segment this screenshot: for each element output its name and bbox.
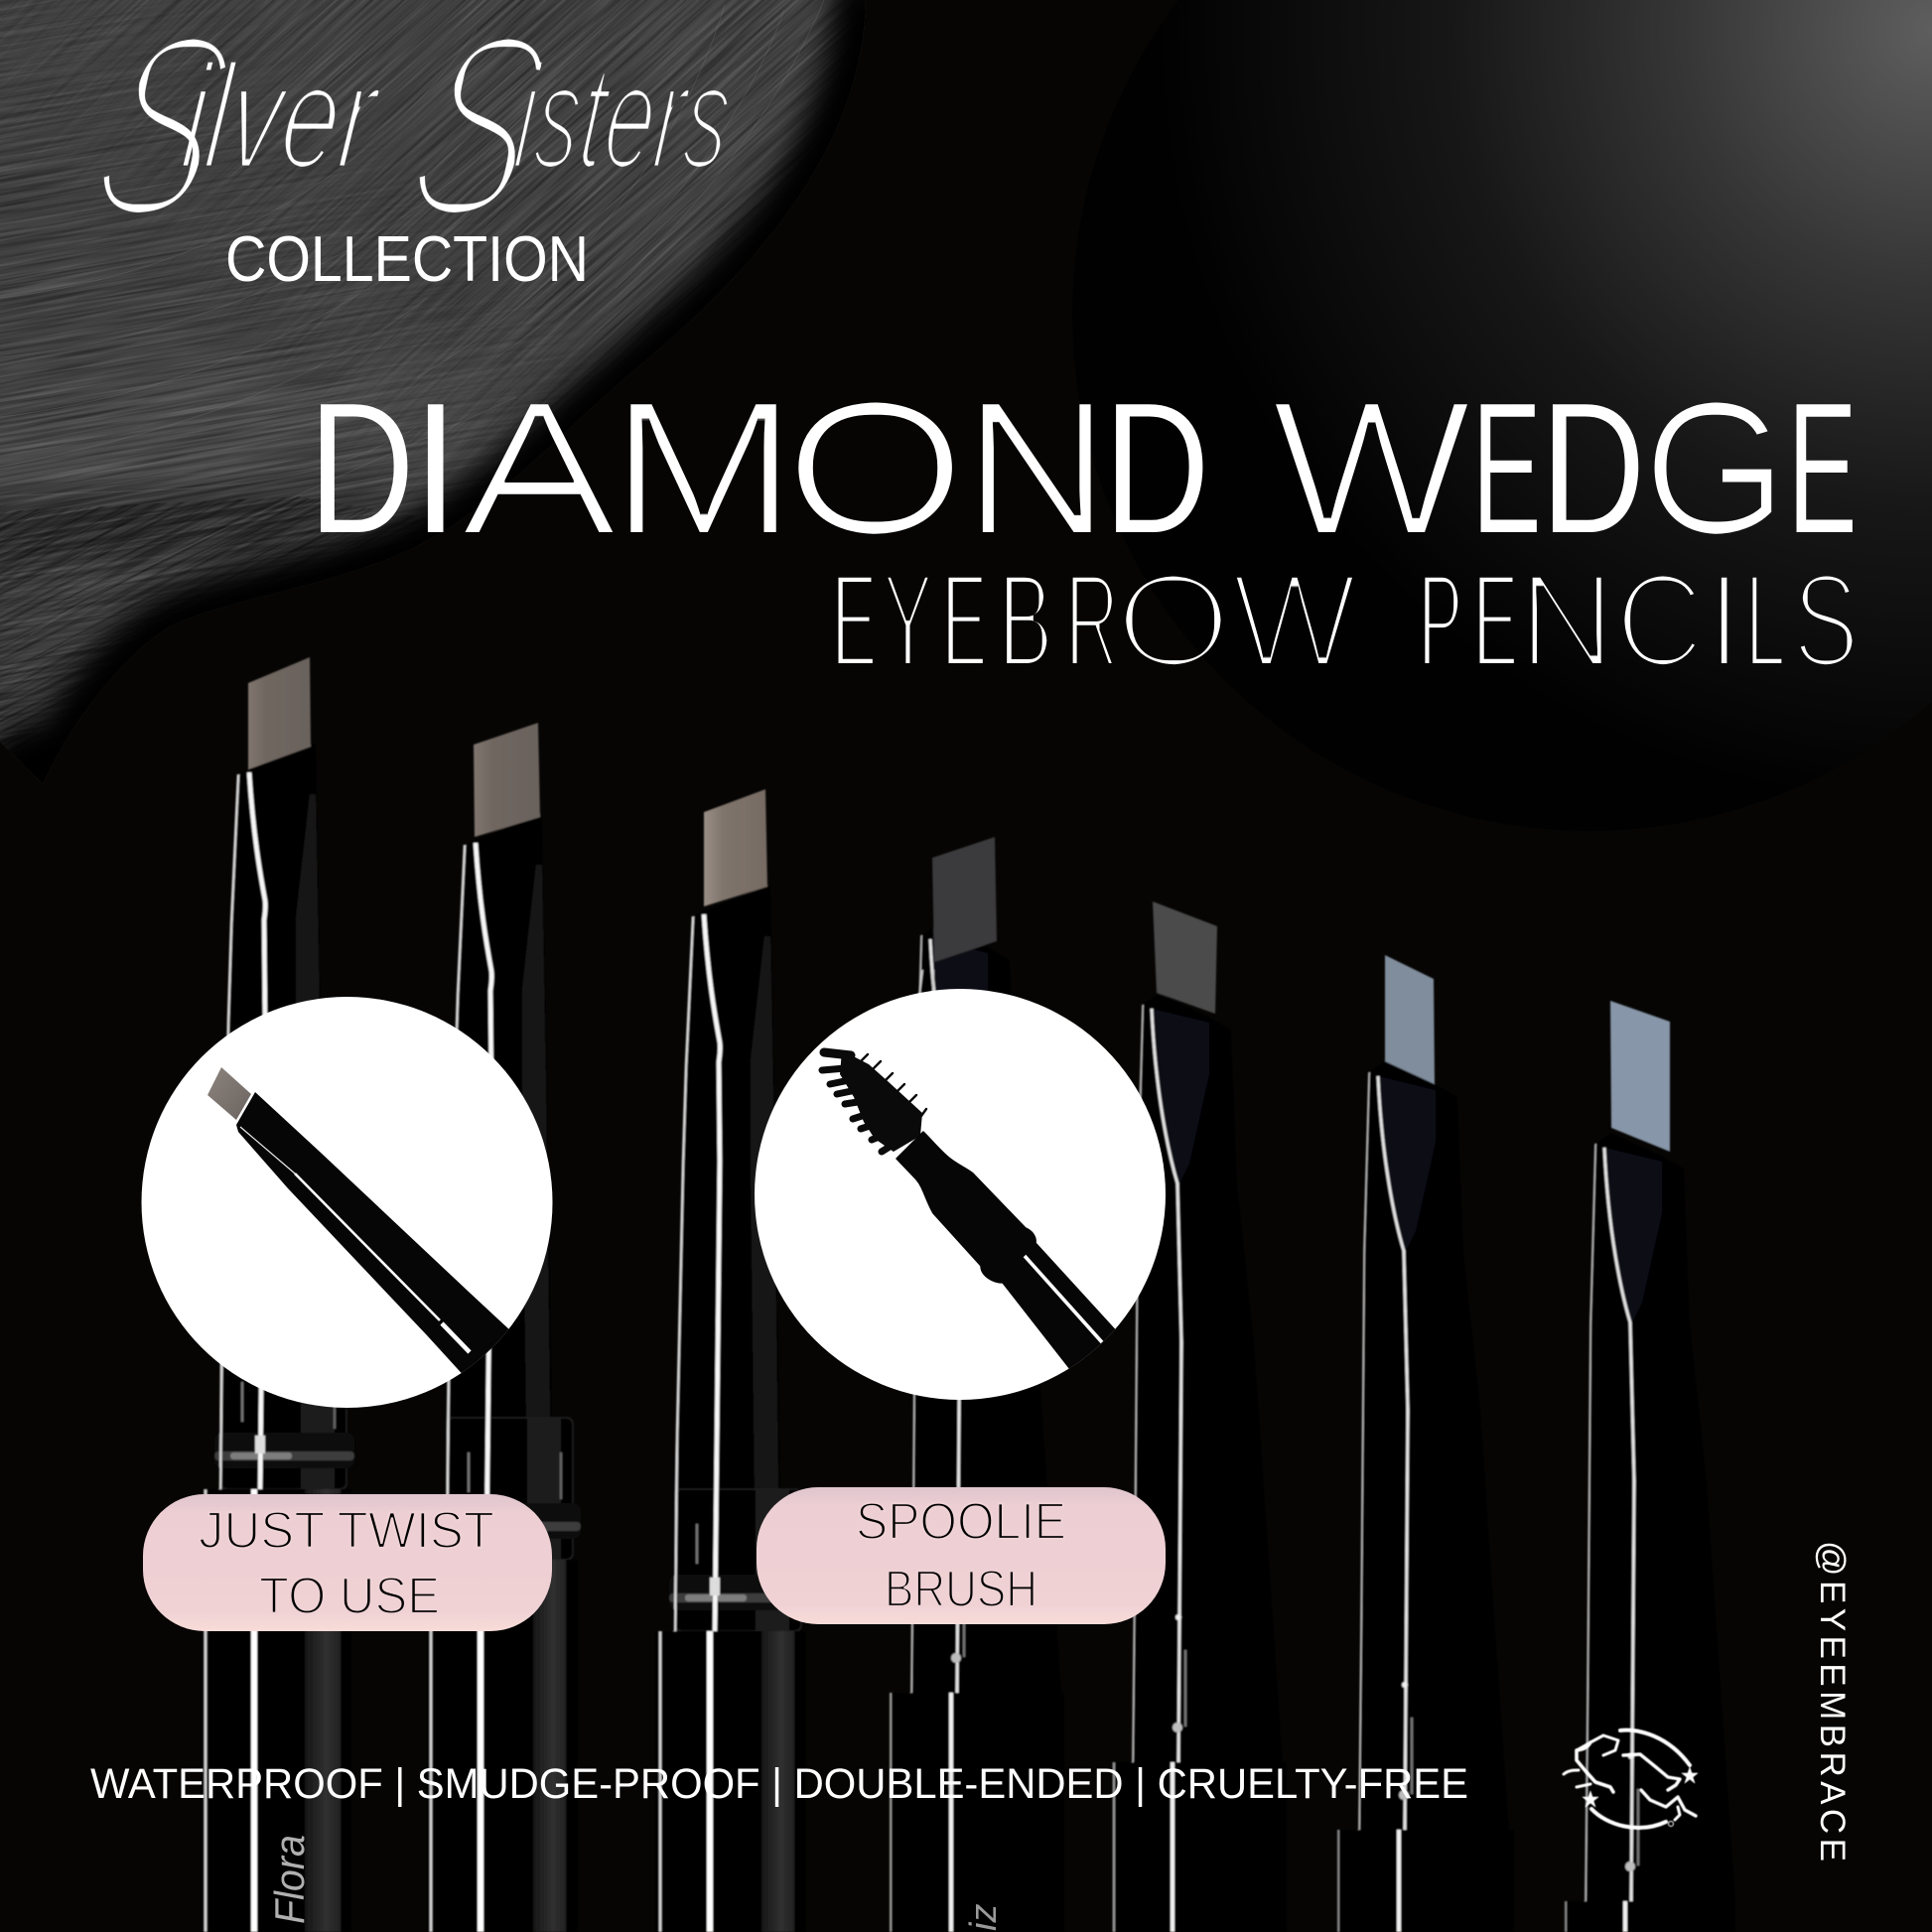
pencil 5 <box>1112 901 1287 1932</box>
pill: spoolie brush: BRUSH <box>885 1561 1037 1618</box>
title: DIAMOND WEDGE: D <box>1541 363 1645 574</box>
title: DIAMOND WEDGE: N <box>963 363 1111 574</box>
subheading: COLLECTION: COLLECTION <box>225 222 589 295</box>
icon: leaping bunny <box>1564 1730 1698 1828</box>
hair photo panel <box>0 0 866 784</box>
circle: twist pencil <box>141 997 552 1408</box>
title: DIAMOND WEDGE: E <box>1788 363 1857 574</box>
title: DIAMOND WEDGE <box>309 363 1857 574</box>
subtitle: EYEBROW PENCILS: O <box>1115 547 1231 695</box>
subtitle: EYEBROW PENCILS: E <box>832 547 876 695</box>
title: DIAMOND WEDGE: G <box>1642 363 1788 574</box>
title: DIAMOND WEDGE: A <box>459 363 618 574</box>
pencil barrel <box>236 1092 508 1373</box>
title: DIAMOND WEDGE: M <box>609 363 798 574</box>
circle: spoolie brush <box>755 989 1166 1410</box>
title: DIAMOND WEDGE: O <box>783 363 967 574</box>
script heading: Silver Sisters: ilver <box>176 33 384 200</box>
barrel name fragment: iz <box>963 1904 1005 1931</box>
barrel name: Flora: Flora <box>266 1835 313 1924</box>
script heading: Silver Sisters: isters <box>508 33 739 200</box>
subtitle: EYEBROW PENCILS: Y <box>883 547 933 695</box>
title: DIAMOND WEDGE: D <box>309 363 414 574</box>
brush handle <box>896 1131 1116 1368</box>
subtitle: EYEBROW PENCILS: E <box>941 547 986 695</box>
pencil 2 <box>427 723 581 1932</box>
title: DIAMOND WEDGE: W <box>1271 363 1472 574</box>
pencil 3 <box>655 789 809 1932</box>
title: DIAMOND WEDGE: I <box>411 363 461 574</box>
subtitle: EYEBROW PENCILS: B <box>999 547 1052 695</box>
pill: just twist to use <box>143 1494 552 1631</box>
wedge tip <box>207 1067 251 1120</box>
subtitle: EYEBROW PENCILS <box>832 547 1859 695</box>
subtitle: EYEBROW PENCILS: R <box>1064 547 1118 695</box>
title: DIAMOND WEDGE: D <box>1104 363 1209 574</box>
sphere backdrop <box>1072 0 1932 831</box>
pill: spoolie brush <box>757 1487 1166 1624</box>
title: DIAMOND WEDGE: E <box>1472 363 1541 574</box>
pill: just twist to use: JUST TWIST <box>199 1502 494 1560</box>
pencil 1 <box>201 657 354 1932</box>
pencil 7 <box>1565 1001 1735 1932</box>
feature line: WATERPROOF | SMUDGE-PROOF | DOUBLE-ENDED | CRUELTY-FREE <box>90 1760 1468 1808</box>
pencil 6 <box>1338 955 1514 1932</box>
subtitle: EYEBROW PENCILS: C <box>1615 547 1705 695</box>
script heading: Silver Sisters <box>72 0 739 271</box>
subtitle: EYEBROW PENCILS: W <box>1231 547 1358 695</box>
subtitle: EYEBROW PENCILS: I <box>1706 547 1742 695</box>
spoolie bristles <box>822 1050 926 1152</box>
subtitle: EYEBROW PENCILS: S <box>1793 547 1859 695</box>
pill: just twist to use: TO USE <box>259 1568 440 1625</box>
subtitle: EYEBROW PENCILS: N <box>1518 547 1616 695</box>
subtitle: EYEBROW PENCILS: P <box>1419 547 1462 695</box>
pencil 4 <box>890 837 1064 1932</box>
subtitle: EYEBROW PENCILS: E <box>1473 547 1517 695</box>
subtitle: EYEBROW PENCILS: L <box>1745 547 1785 695</box>
pill: spoolie brush: SPOOLIE <box>856 1493 1066 1551</box>
social handle: @EYEEMBRACE <box>1813 1541 1852 1862</box>
